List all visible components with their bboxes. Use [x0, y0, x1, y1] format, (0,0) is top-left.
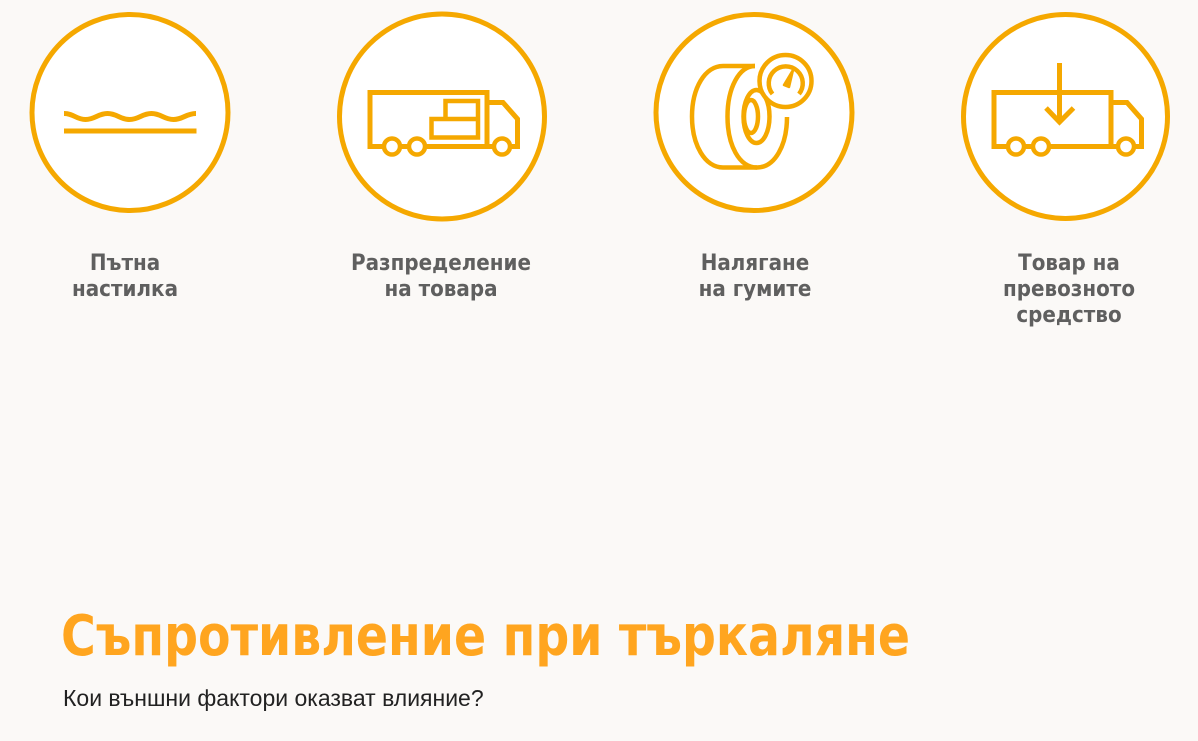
- label: vehicle load: превозното: [1002, 277, 1135, 302]
- label: load distribution: [351, 251, 530, 302]
- title: Съпротивление при търкаляне: [61, 604, 910, 669]
- icon: road surface: [32, 14, 228, 210]
- label: tyre pressure: Налягане: [700, 251, 809, 276]
- icon: truck with load distribution: [340, 14, 544, 219]
- label: vehicle load: средство: [1016, 303, 1121, 328]
- label: road surface: настилка: [72, 277, 178, 302]
- label: road surface: [72, 251, 178, 302]
- label: tyre pressure: [698, 251, 811, 302]
- label: vehicle load: Товар на: [1018, 251, 1119, 276]
- label: load distribution: на товара: [384, 277, 497, 302]
- label: road surface: Пътна: [90, 251, 160, 276]
- label: load distribution: Разпределение: [351, 251, 530, 276]
- subtitle: Кои външни фактори оказват влияние?: [63, 685, 484, 711]
- label: vehicle load: [1002, 251, 1135, 328]
- label: tyre pressure: на гумите: [698, 277, 811, 302]
- icon: truck with vehicle load arrow: [964, 14, 1168, 218]
- icon: tyre pressure gauge: [656, 14, 852, 210]
